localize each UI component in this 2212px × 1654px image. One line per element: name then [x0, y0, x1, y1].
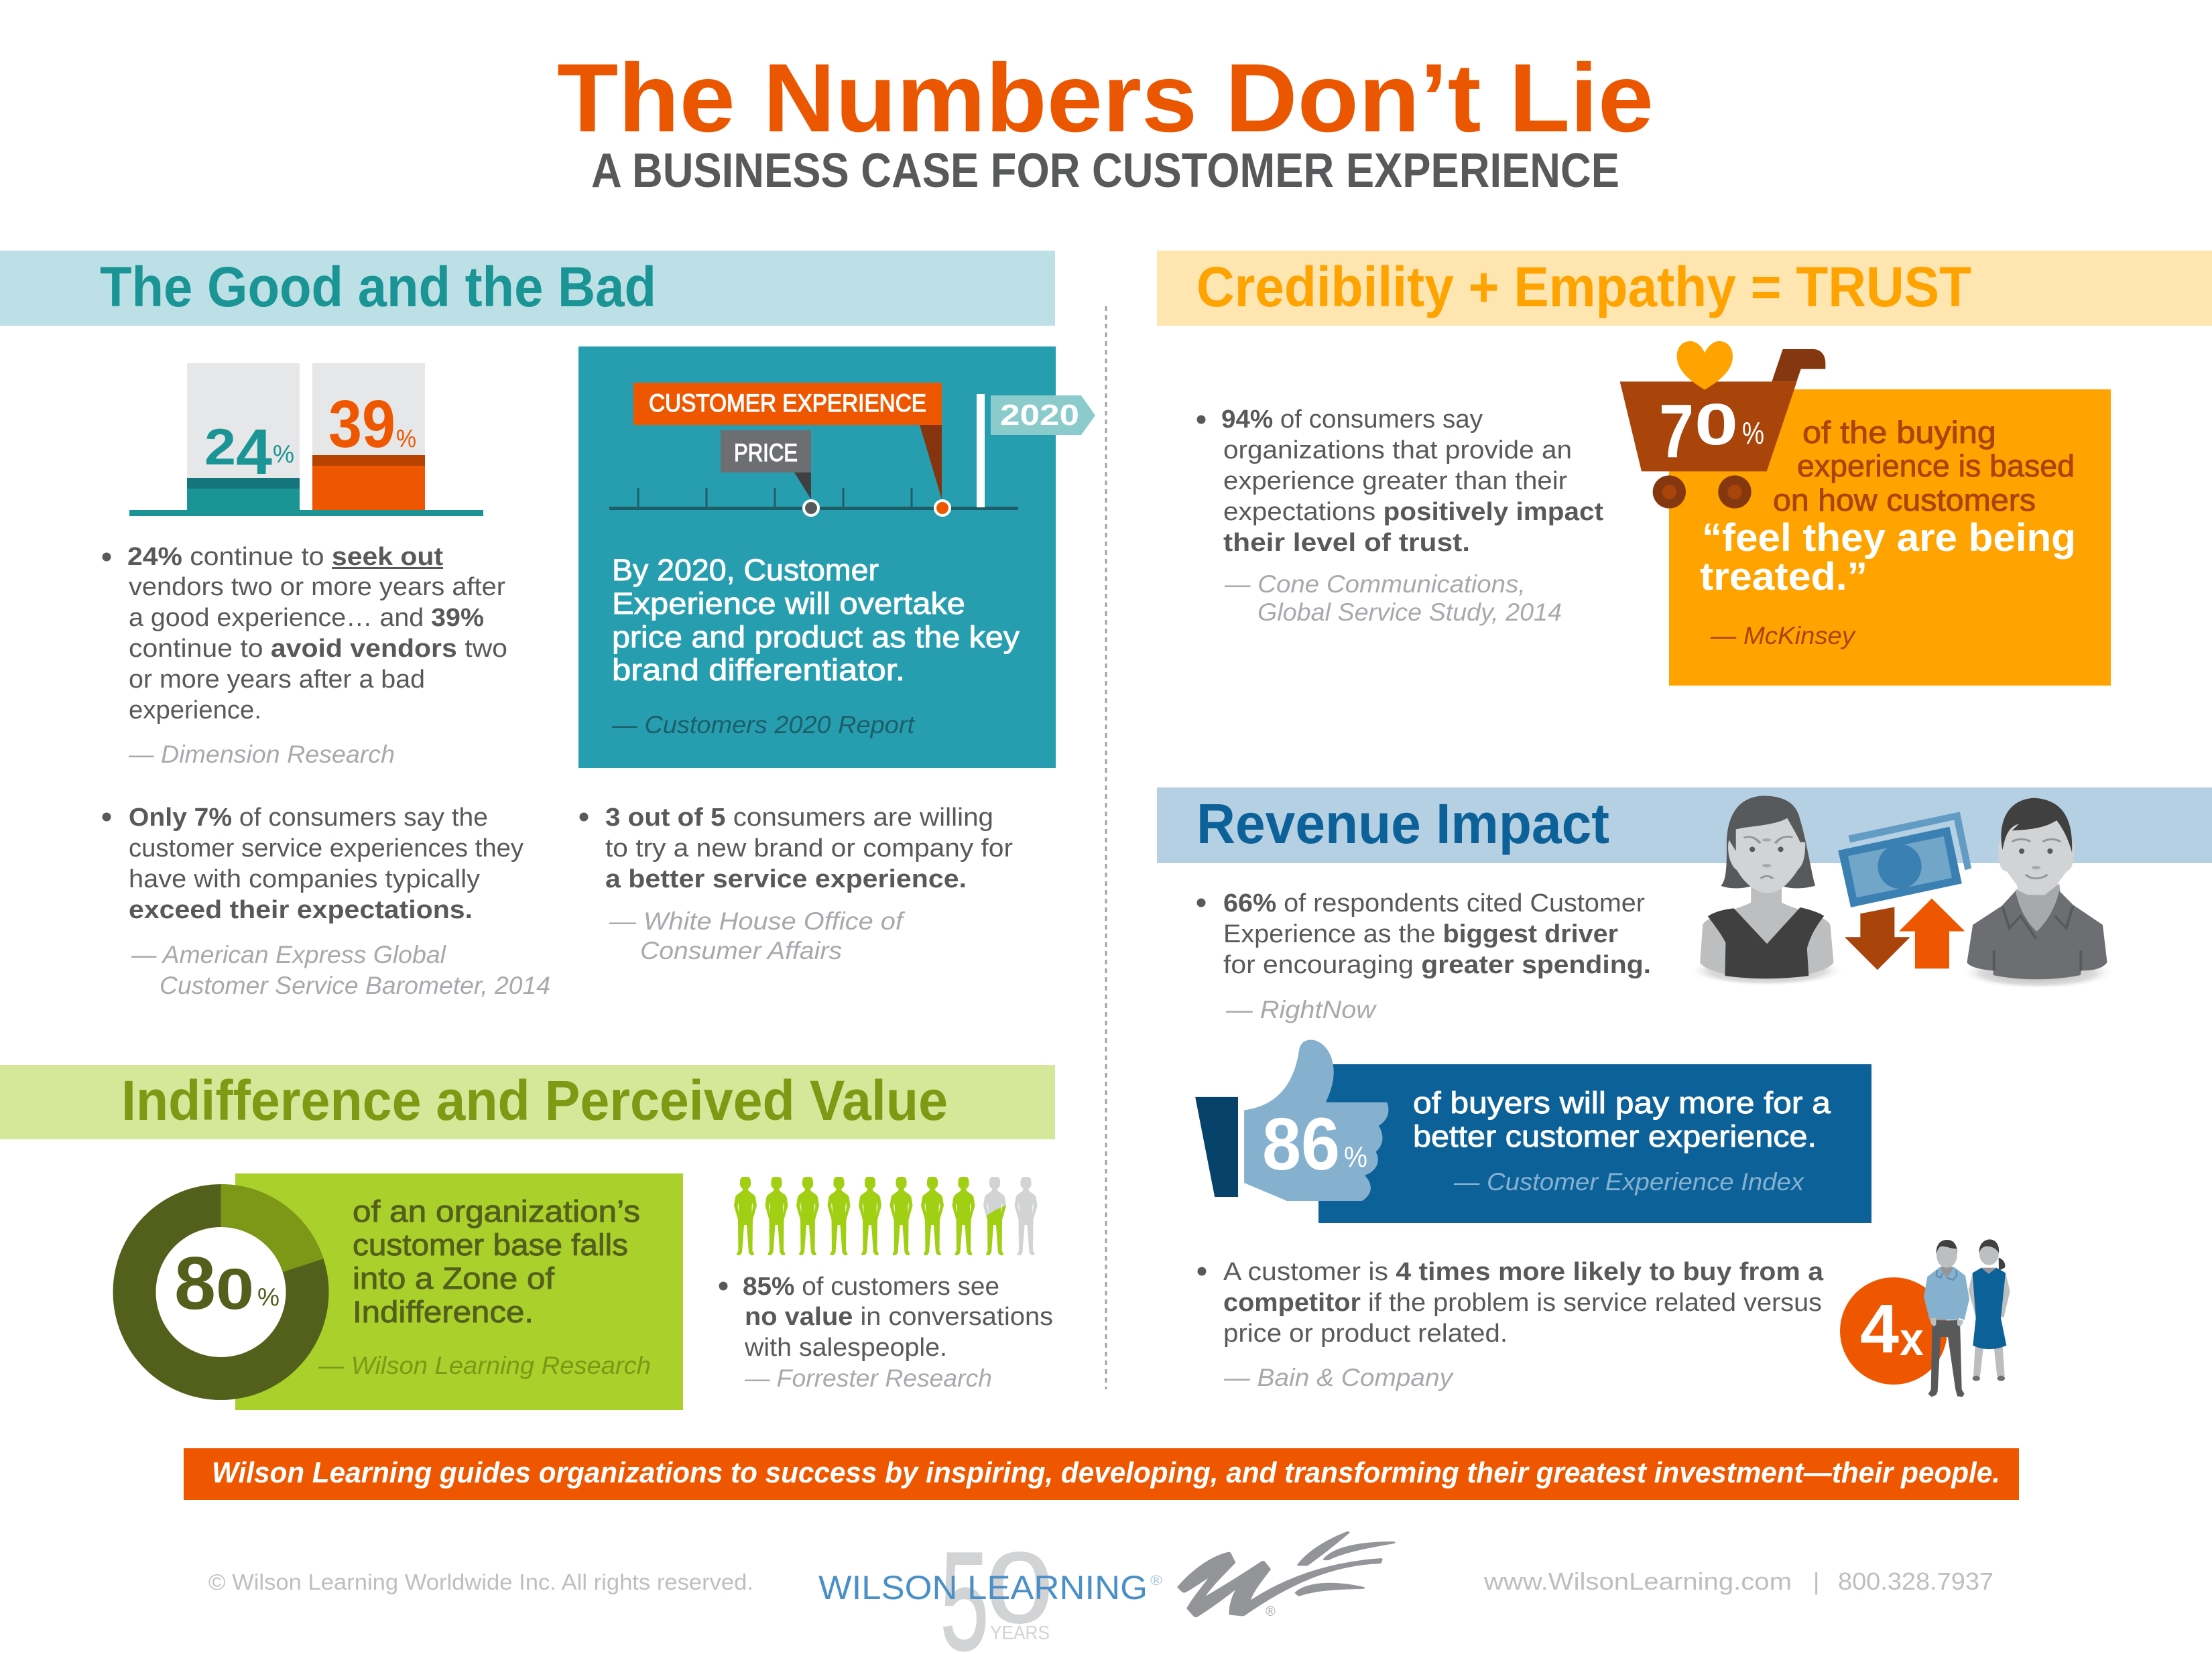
- footer: website and phone: 800.328.7937: [1838, 1568, 1993, 1595]
- text: zone of indifference: [353, 1194, 640, 1329]
- text block: 85% no value: — Forrester Research: [744, 1364, 992, 1392]
- text: zone of indifference: into a Zone of: [353, 1261, 555, 1295]
- text: by 2020: Experience will overtake: [612, 586, 965, 621]
- text block: only 7%: — American Express Global: [131, 941, 447, 968]
- text block: 3 out of 5: Consumer Affairs: [640, 937, 842, 964]
- text block: 66% of respondents: 66% of respondents cited Customer: [1223, 889, 1645, 917]
- heading: Revenue Impact: [1157, 787, 2212, 863]
- bar chart: 24% and 39%: 39: [328, 387, 395, 462]
- text: zone of indifference: of an organization’s: [353, 1194, 640, 1228]
- text block: 85% no value: with salespeople.: [744, 1334, 947, 1362]
- heading: Revenue Impact: Revenue Impact: [1196, 792, 1609, 855]
- text block: 3 out of 5: — White House Office of: [609, 907, 906, 935]
- heading: Credibility + Empathy = TRUST: [1157, 251, 2212, 326]
- bar chart: 24% and 39%: %: [396, 425, 416, 453]
- text block: 85% no value: 85% of customers see: [743, 1273, 999, 1301]
- text block: 94% of consumers: — Cone Communications,: [1224, 570, 1526, 598]
- donut chart: 80%: 8: [174, 1242, 216, 1325]
- text block: 3 out of 5: to try a new brand or company for: [605, 834, 1013, 863]
- donut chart: 80%: 0: [216, 1257, 254, 1322]
- icon: ten people, 85% green: [734, 1177, 1038, 1255]
- woman: [1969, 1239, 2010, 1381]
- stat: 86%: %: [1344, 1141, 1367, 1173]
- text: zone of indifference: Indifference.: [353, 1295, 534, 1329]
- text block: 94% of consumers: their level of trust.: [1223, 529, 1470, 557]
- text block: 24% seek out: continue to avoid vendors two: [129, 635, 507, 663]
- text block: 4 times more likely: A customer is 4 times more likely to buy from a: [1223, 1258, 1824, 1286]
- text block: only 7%: [102, 804, 550, 999]
- text block: 24% seek out: [102, 543, 507, 768]
- text block: 66% of respondents: Experience as the biggest driver: [1223, 920, 1618, 948]
- text: buying experience: [1773, 415, 2075, 517]
- text block: 66% of respondents: [1197, 889, 1651, 1023]
- text block: 24% seek out: vendors two or more years after: [129, 573, 505, 601]
- logo: 50 years: [940, 1524, 1052, 1654]
- icon: money with up and down arrows: [1838, 812, 1971, 970]
- illustration: man and woman customers: [1924, 1239, 2010, 1397]
- text block: 85% no value: no value in conversations: [745, 1303, 1053, 1331]
- icon: 4x circle: x: [1900, 1313, 1924, 1365]
- text block: 4 times more likely: competitor if the problem is service related versus: [1223, 1289, 1822, 1317]
- illustration: unhappy woman: [1688, 796, 1845, 987]
- text: by 2020: price and product as the key: [612, 620, 1020, 654]
- heading: The Good and the Bad: [0, 251, 1055, 326]
- quote: [1700, 516, 2076, 598]
- stat: 70%: 7: [1659, 389, 1694, 473]
- text block: 4 times more likely: price or product related.: [1223, 1320, 1508, 1348]
- illustration: happy man: [1961, 798, 2115, 989]
- text: pay more: [1413, 1086, 1831, 1153]
- logo: 50 years: 0: [987, 1533, 1052, 1643]
- text block: 66% of respondents: — RightNow: [1225, 996, 1377, 1023]
- subtitle: A BUSINESS CASE FOR CUSTOMER EXPERIENCE: [591, 144, 1619, 198]
- man: [1924, 1240, 1969, 1397]
- text: pay more: of buyers will pay more for a: [1413, 1086, 1831, 1120]
- footer: website and phone: |: [1813, 1568, 1819, 1595]
- donut chart: 80%: %: [257, 1283, 280, 1312]
- text block: 3 out of 5: 3 out of 5 consumers are willing: [605, 804, 993, 832]
- quote: “feel they are being: [1702, 516, 2076, 560]
- stat: 70%: %: [1742, 416, 1764, 450]
- text block: 94% of consumers: Global Service Study, 2014: [1257, 598, 1562, 626]
- footer: website and phone: www.WilsonLearning.com: [1483, 1568, 1792, 1595]
- text: buying experience: experience is based: [1797, 448, 2075, 483]
- stat: 70%: 0: [1695, 392, 1738, 457]
- banner: tagline: [184, 1448, 2019, 1500]
- chart: timeline: PRICE: [734, 439, 798, 466]
- text block: 3 out of 5: a better service experience.: [605, 865, 967, 893]
- panel: 80% zone of indifference: [113, 1173, 683, 1410]
- logo: registered mark: ®: [1266, 1604, 1276, 1619]
- text block: 24% seek out: experience.: [129, 696, 261, 724]
- chart: timeline: 2020: [1000, 399, 1079, 432]
- source: — Wilson Learning Research: [318, 1352, 651, 1379]
- logo: Wilson Learning wordmark: ®: [1150, 1574, 1162, 1588]
- text block: only 7%: customer service experiences they: [129, 834, 524, 863]
- stat: 86%: 86: [1262, 1103, 1340, 1186]
- text: buying experience: of the buying: [1802, 415, 1996, 450]
- bar chart: 24% and 39%: 2: [204, 419, 236, 476]
- text block: 24% seek out: a good experience… and 39%: [129, 604, 484, 632]
- icon: thumbs up: [1195, 1040, 1388, 1201]
- logo: W mark: [1179, 1533, 1394, 1616]
- text block: 24% seek out: or more years after a bad: [129, 665, 425, 694]
- text block: 85% no value: [719, 1273, 1053, 1392]
- heading: The Good and the Bad: The Good and the Bad: [100, 255, 656, 318]
- title: The Numbers Don’t Lie: [557, 44, 1654, 152]
- text block: 94% of consumers: organizations that provide an: [1223, 436, 1572, 464]
- text block: 94% of consumers: [1197, 405, 1603, 626]
- banner: tagline: Wilson Learning guides organizations to success by inspiring, developing, and transforming their greatest investment—their people.: [212, 1456, 2000, 1489]
- text block: 94% of consumers: experience greater than their: [1223, 467, 1567, 495]
- bar chart: 24% and 39%: %: [273, 440, 294, 468]
- heading: Credibility + Empathy = TRUST: Credibility + Empathy = TRUST: [1196, 255, 1971, 318]
- text block: only 7%: exceed their expectations.: [129, 896, 473, 924]
- quote: treated.”: [1700, 555, 1867, 598]
- icon: 4x circle: 4: [1860, 1290, 1899, 1367]
- panel: customer experience timeline: [578, 346, 1095, 768]
- text block: only 7%: have with companies typically: [129, 865, 480, 893]
- panel: 86% of buyers: [1195, 1040, 1871, 1223]
- text block: only 7%: Only 7% of consumers say the: [129, 804, 488, 832]
- bar chart: 24% and 39%: [129, 363, 483, 516]
- source: — Customers 2020 Report: [611, 711, 916, 739]
- chart: timeline: CUSTOMER EXPERIENCE: [649, 389, 926, 417]
- text block: 66% of respondents: for encouraging greater spending.: [1223, 951, 1651, 979]
- chart: timeline: [609, 383, 1095, 515]
- text: pay more: better customer experience.: [1413, 1119, 1817, 1153]
- logo: 50 years: YEARS: [990, 1623, 1050, 1644]
- text block: 4 times more likely: [1197, 1258, 1824, 1391]
- text block: only 7%: Customer Service Barometer, 2014: [160, 972, 550, 999]
- text block: 4 times more likely: — Bain & Company: [1223, 1364, 1455, 1391]
- text: by 2020: brand differentiator.: [612, 653, 905, 687]
- text: zone of indifference: customer base falls: [353, 1228, 628, 1262]
- logo: Wilson Learning wordmark: WILSON LEARNING: [818, 1569, 1148, 1606]
- text: buying experience: on how customers: [1773, 483, 2036, 517]
- text block: 94% of consumers: expectations positively impact: [1223, 498, 1603, 526]
- text block: 24% seek out: — Dimension Research: [128, 741, 395, 768]
- text: by 2020: [612, 553, 1020, 687]
- heading: Indifference and Perceived Value: Indifference and Perceived Value: [121, 1069, 948, 1132]
- stat: 70%: [1659, 389, 1764, 473]
- footer: copyright: © Wilson Learning Worldwide Inc. All rights reserved.: [208, 1570, 753, 1594]
- donut chart: 80%: [113, 1184, 328, 1400]
- text block: 94% of consumers: 94% of consumers say: [1221, 405, 1483, 434]
- text block: 3 out of 5: [579, 804, 1013, 964]
- icon: shopping cart with heart: [1620, 341, 1825, 509]
- bar chart: 24% and 39%: 4: [236, 416, 272, 488]
- source: — McKinsey: [1710, 622, 1857, 649]
- panel: 70% shopping cart: [1620, 341, 2111, 686]
- divider: [1105, 306, 1107, 1389]
- text: by 2020: By 2020, Customer: [612, 553, 879, 587]
- footer: website and phone: [1483, 1568, 1993, 1595]
- text block: 24% seek out: 24% continue to seek out: [127, 543, 443, 571]
- icon: 4x circle: [1840, 1277, 1947, 1385]
- source: — Customer Experience Index: [1453, 1168, 1805, 1196]
